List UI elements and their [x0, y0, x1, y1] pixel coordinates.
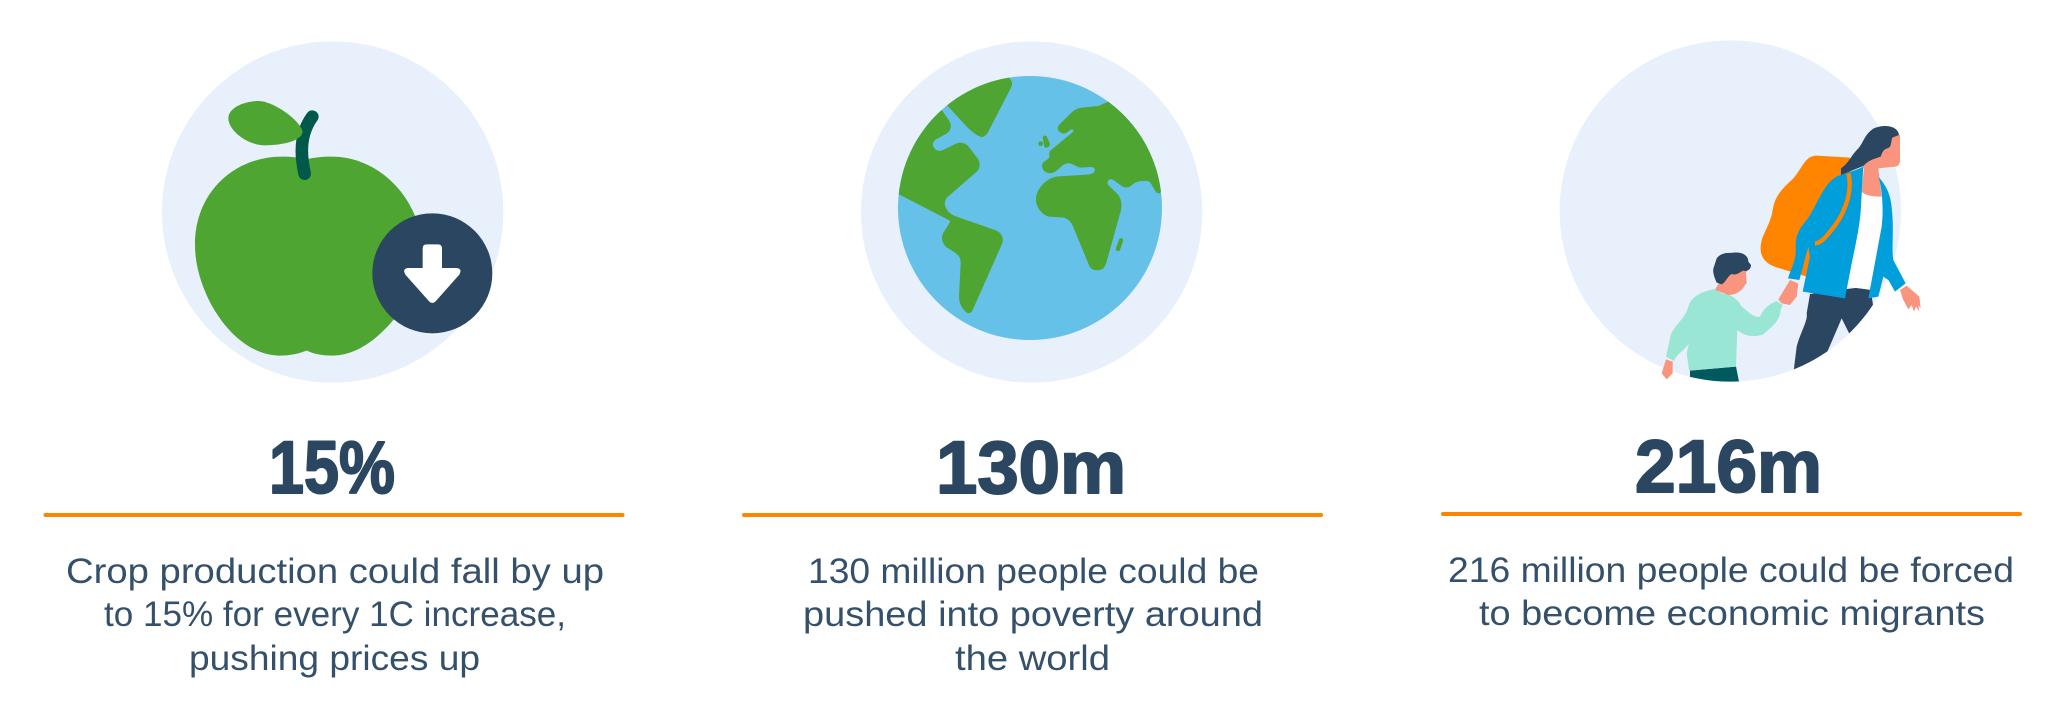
child hand [1662, 359, 1673, 379]
woman hair [1841, 126, 1899, 175]
ocean [898, 76, 1162, 340]
woman jacket [1788, 167, 1863, 298]
child hair [1713, 252, 1751, 284]
background circle [1560, 40, 1901, 382]
icon: woman and child walking [1560, 40, 1921, 383]
panel: crop production [44, 41, 624, 678]
backpack strap [1815, 173, 1850, 243]
orange divider [44, 513, 624, 517]
description text: 216 million people could be forced [1448, 551, 2014, 590]
stat: 216m: 216m [1635, 425, 1822, 508]
woman shirt [1846, 193, 1883, 290]
apple stem [302, 117, 312, 174]
panel: poverty [742, 41, 1323, 678]
apple body [195, 157, 423, 356]
description text: to 15% for every 1C increase, [104, 595, 566, 634]
orange divider [1441, 512, 2022, 516]
background circle [162, 41, 503, 383]
child sweater [1666, 289, 1783, 371]
description text: to become economic migrants [1479, 594, 1985, 633]
background circle [861, 41, 1202, 383]
woman jacket right side [1868, 177, 1906, 298]
stat: 130m: 130m [936, 426, 1126, 509]
down arrow [404, 244, 461, 303]
apple leaf [228, 101, 303, 145]
description text [66, 552, 604, 678]
icon: apple with down arrow [162, 41, 503, 383]
description text: pushed into poverty around [803, 595, 1263, 634]
child pants [1690, 367, 1739, 383]
joined hands [1778, 280, 1798, 305]
woman trousers [1793, 286, 1873, 373]
description text: 130 million people could be [808, 552, 1259, 591]
description text [1448, 551, 2014, 633]
panel: migrants [1441, 40, 2022, 633]
orange divider [742, 513, 1323, 517]
continents [898, 78, 1161, 314]
description text: Crop production could fall by up [66, 552, 604, 591]
woman face and neck [1862, 135, 1900, 197]
description text: pushing prices up [189, 639, 480, 678]
description text: the world [955, 639, 1110, 678]
icon: globe [861, 41, 1202, 383]
down arrow badge [372, 213, 492, 333]
description text [803, 552, 1263, 678]
woman right hand [1900, 286, 1921, 312]
child head [1715, 267, 1748, 295]
backpack [1761, 156, 1850, 277]
stat: 15%: 15% [269, 426, 395, 509]
